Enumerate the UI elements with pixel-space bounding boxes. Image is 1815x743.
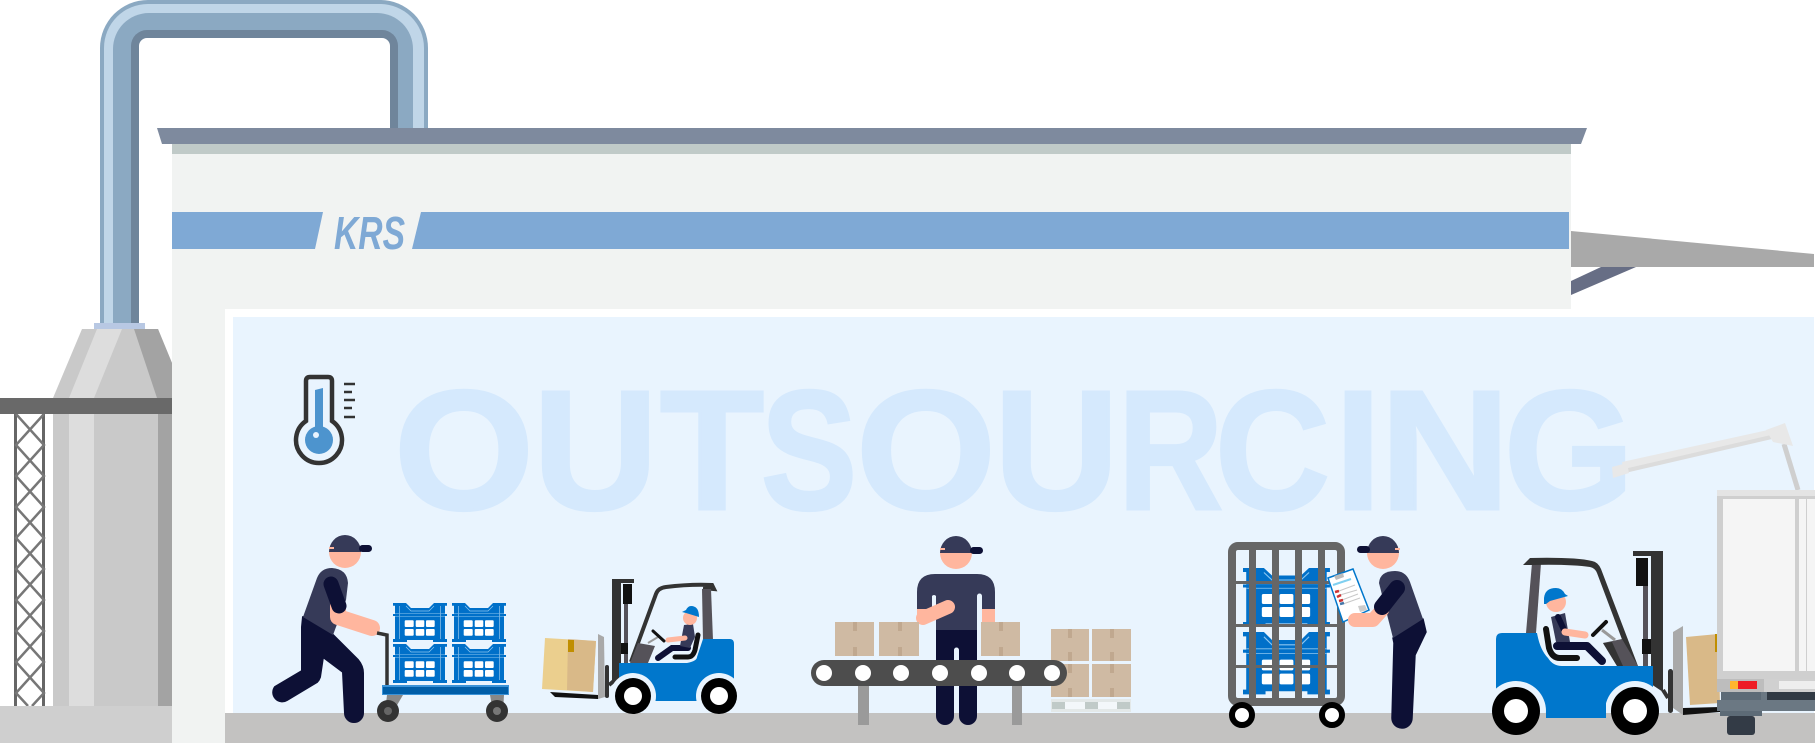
- background title OUTSOURCING: R: [1118, 356, 1223, 546]
- background title OUTSOURCING: I: [1335, 356, 1381, 546]
- background title OUTSOURCING: U: [994, 356, 1119, 546]
- background title OUTSOURCING: S: [761, 356, 857, 546]
- dust collector hopper: [53, 323, 172, 706]
- background title OUTSOURCING: O: [394, 356, 534, 546]
- blue stripe with logo: KRS: [334, 207, 405, 259]
- clipboard: [1328, 569, 1369, 622]
- platform beam: [0, 398, 172, 414]
- icon: thermometer: [296, 377, 355, 463]
- ground slab left: [0, 706, 172, 743]
- interior opening: [225, 309, 1815, 713]
- background title OUTSOURCING: O: [856, 356, 996, 546]
- small forklift: [542, 579, 750, 725]
- dock arm: [1612, 423, 1798, 490]
- duct pipe: [100, 0, 428, 438]
- worker at conveyor: [917, 536, 995, 725]
- background title OUTSOURCING: G: [1504, 356, 1634, 546]
- roll cage with crates: [1232, 546, 1342, 725]
- conveyor belt: [811, 660, 1067, 725]
- steel lattice tower: [16, 414, 44, 706]
- background title OUTSOURCING: T: [660, 356, 764, 546]
- worker with clipboard: [1328, 536, 1426, 728]
- roof: [157, 128, 1587, 144]
- large forklift: [1480, 551, 1720, 743]
- background title OUTSOURCING: N: [1380, 356, 1510, 546]
- hand cart with crates: [377, 603, 509, 722]
- truck: [1717, 490, 1815, 735]
- conveyor boxes: [835, 622, 1020, 656]
- background title OUTSOURCING: U: [533, 356, 658, 546]
- floor: [225, 713, 1815, 743]
- worker pushing cart: [273, 535, 372, 722]
- loading canopy: [1571, 231, 1814, 295]
- building wall: [172, 144, 1571, 743]
- blue stripe with logo: [172, 207, 1569, 259]
- stacked pallet boxes: [1051, 629, 1131, 712]
- background title OUTSOURCING: C: [1215, 356, 1330, 546]
